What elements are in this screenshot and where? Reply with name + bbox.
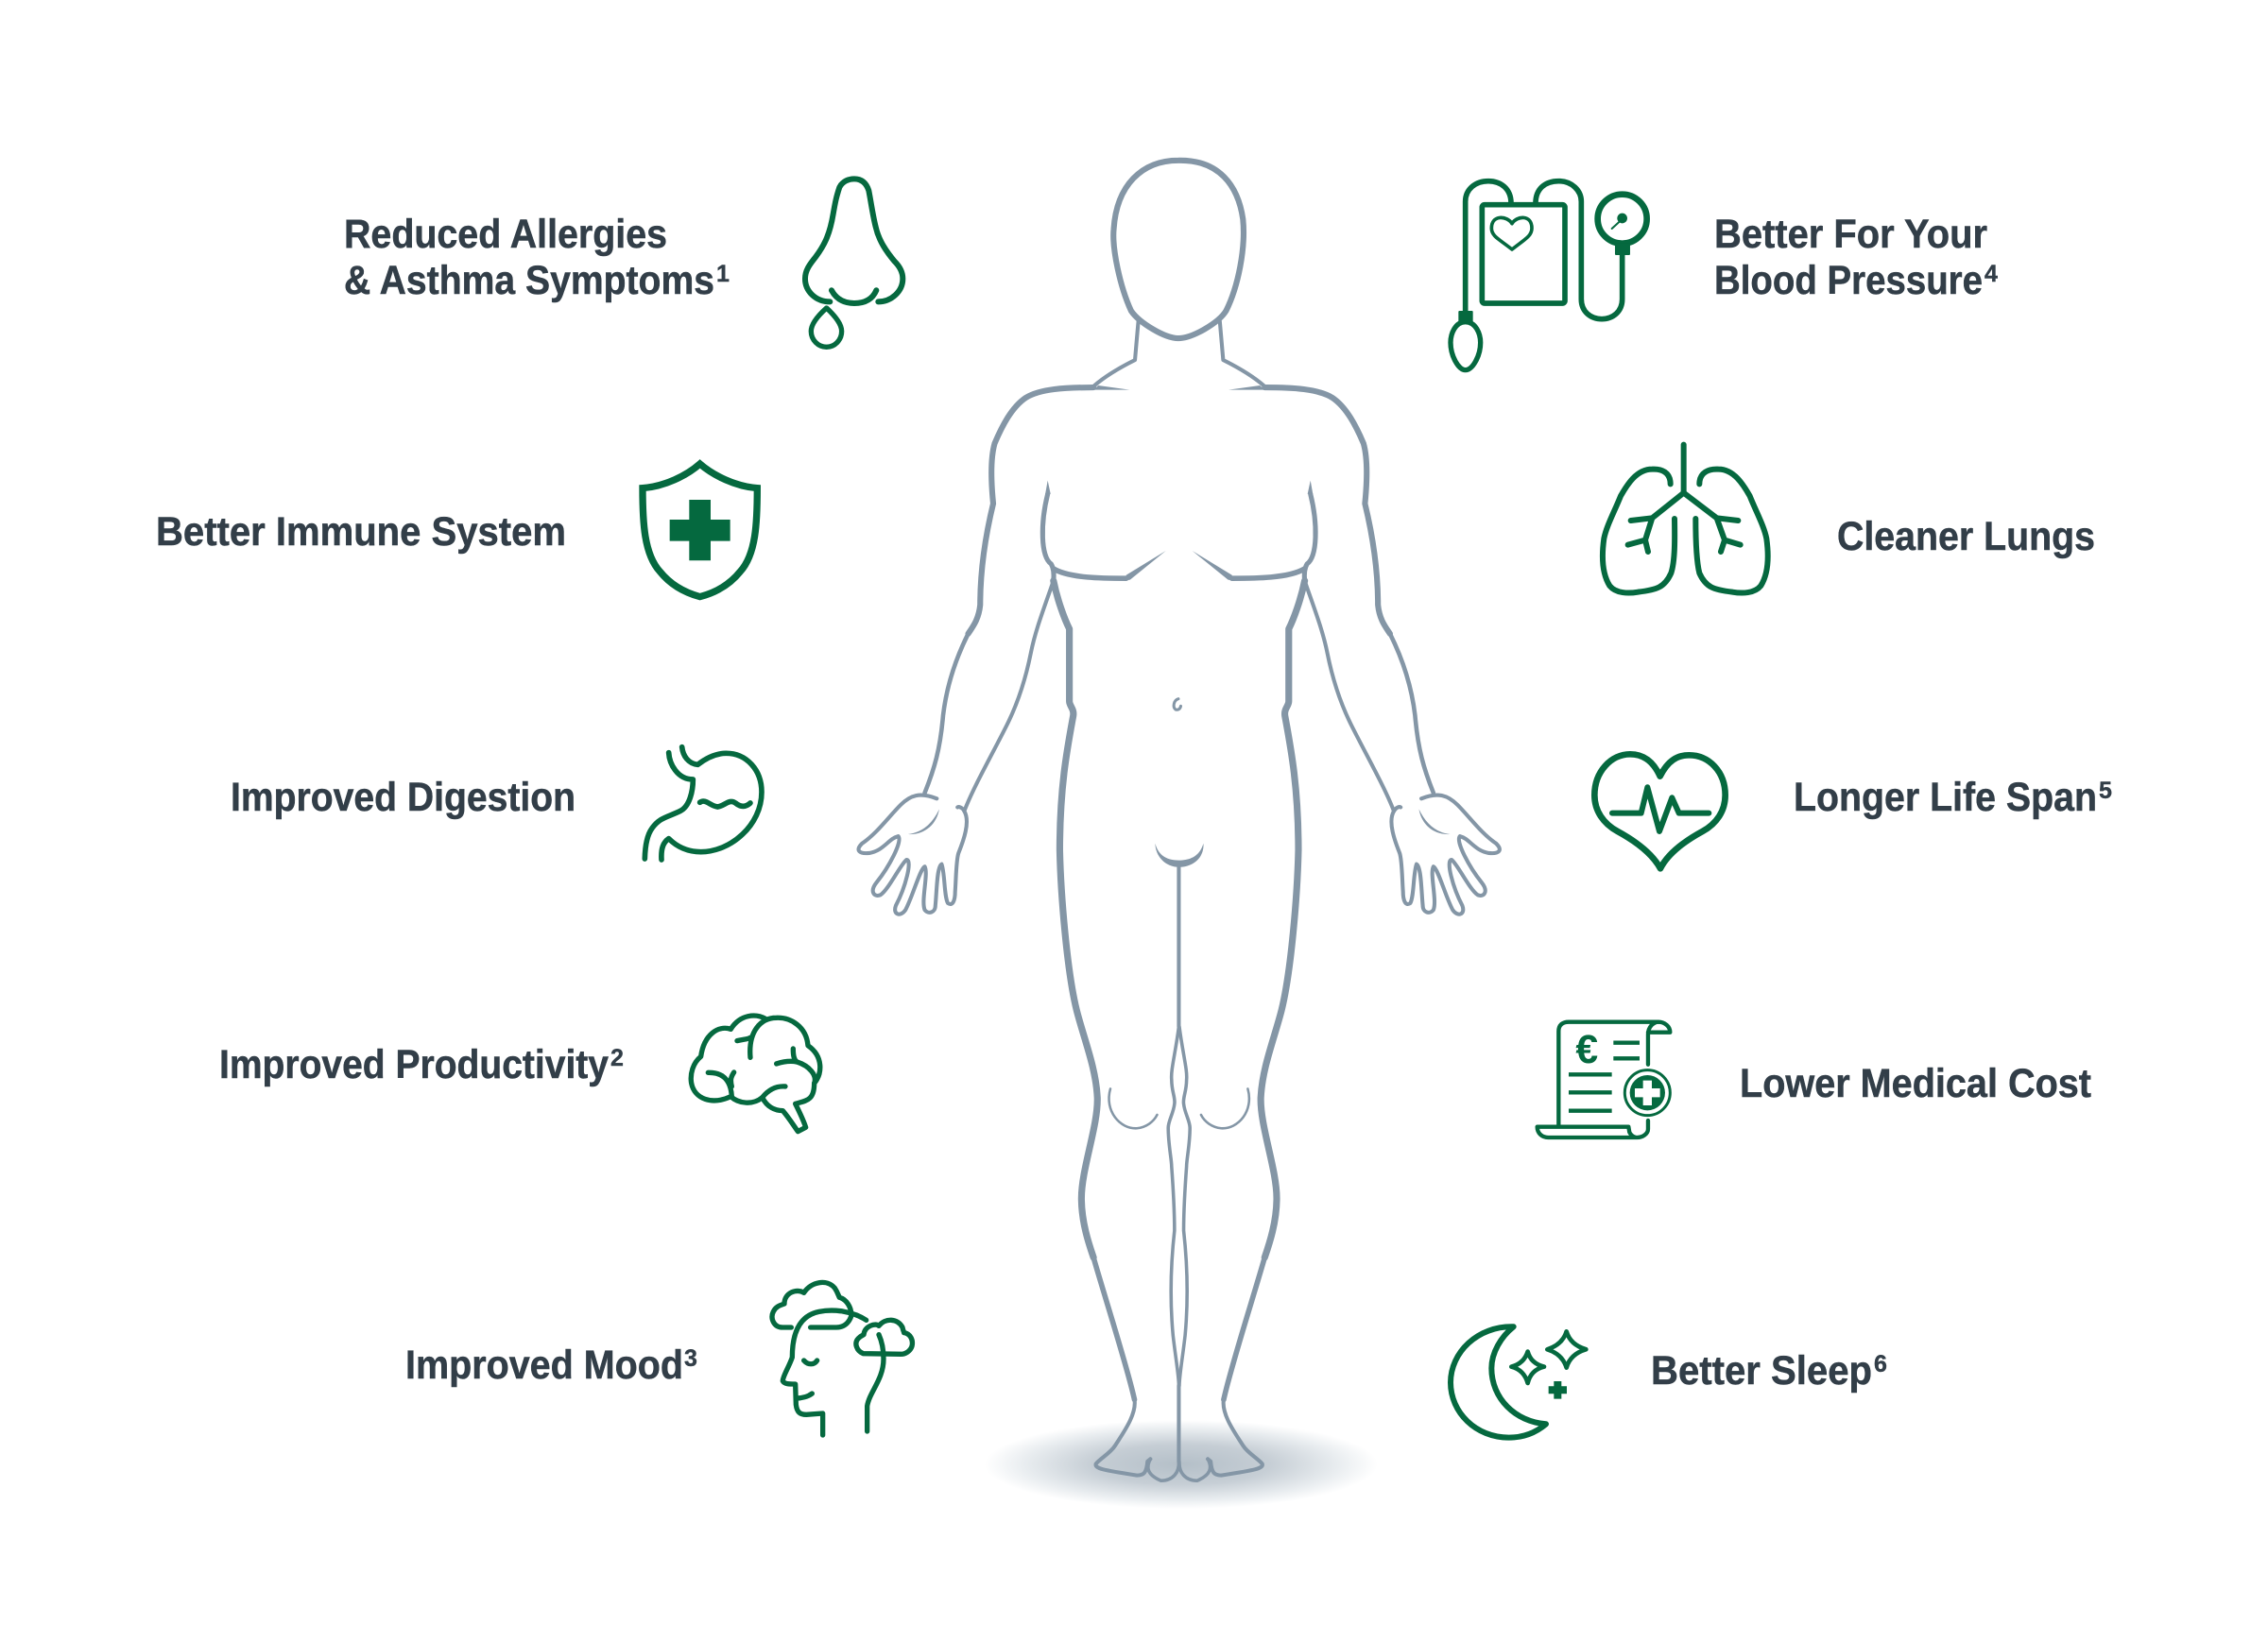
label: Better Immune System: Better Immune System — [156, 509, 566, 555]
label: Cleaner Lungs: Cleaner Lungs — [1837, 514, 2095, 559]
navel — [1174, 699, 1180, 710]
right half of body mirrored — [1179, 321, 1500, 1480]
icon: shield with cross — [643, 464, 757, 597]
icon: lungs — [1603, 445, 1768, 593]
head — [1113, 161, 1244, 338]
icon: stomach — [644, 747, 762, 860]
label: Reduced Allergies & Asthma Symptoms — [344, 212, 730, 303]
icon: heart with pulse — [1594, 754, 1726, 868]
icon: medical bill: € — [1575, 1027, 1598, 1072]
body figure — [859, 161, 1500, 1509]
label: Longer Life Span: Longer Life Span — [1794, 775, 2097, 820]
label: Reduced Allergies & Asthma Symptoms: Reduced Allergies — [344, 212, 667, 257]
label: Improved Productivity: 2 — [610, 1045, 624, 1071]
label: Improved Digestion: Improved Digestion — [231, 775, 576, 820]
icon: blood pressure monitor — [1451, 181, 1647, 370]
label: Reduced Allergies & Asthma Symptoms: 1 — [716, 261, 730, 287]
left half of body — [859, 321, 1178, 1480]
icon: head with clouds — [772, 1282, 912, 1435]
icon: medical bill — [1538, 1022, 1670, 1137]
label: Better For Your Blood Pressure — [1714, 212, 1998, 303]
label: Better For Your Blood Pressure: Blood Pressure — [1714, 258, 1983, 303]
icon: brain — [691, 1016, 820, 1132]
label: Better For Your Blood Pressure: 4 — [1984, 261, 1998, 287]
body outline — [859, 161, 1500, 1480]
label: Improved Productivity: Improved Productivity — [219, 1042, 609, 1087]
label: Longer Life Span: 5 — [2099, 778, 2112, 804]
icon: moon and stars — [1451, 1326, 1586, 1438]
floor shadow — [985, 1420, 1378, 1509]
groin — [1155, 844, 1204, 867]
label: Improved Mood: 3 — [684, 1345, 697, 1372]
label: Better Sleep: 6 — [1874, 1351, 1887, 1377]
label: Better Sleep: Better Sleep — [1651, 1348, 1872, 1394]
centre leg line — [1175, 867, 1182, 1462]
label: Lower Medical Cost: Lower Medical Cost — [1740, 1061, 2091, 1106]
icon: nose with drop — [805, 179, 902, 347]
label: Improved Mood: Improved Mood — [405, 1343, 683, 1388]
label: Reduced Allergies & Asthma Symptoms: & Asthma Symptoms — [344, 258, 714, 303]
label: Better For Your Blood Pressure: Better For Your — [1714, 212, 1987, 257]
